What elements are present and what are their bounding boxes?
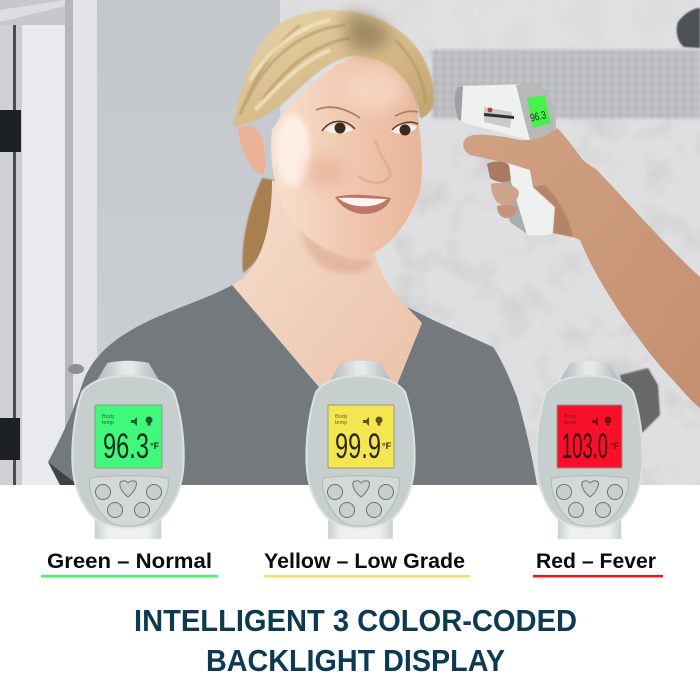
red display — [557, 405, 622, 468]
green screen: 96.3 — [529, 109, 547, 125]
display icons — [592, 416, 612, 426]
gun head grey rear — [516, 83, 556, 140]
device shell — [72, 361, 184, 539]
device label — [484, 107, 514, 128]
fahrenheit unit: °F — [382, 441, 392, 451]
green display — [95, 405, 162, 468]
hand shading — [533, 185, 573, 237]
display icons — [131, 416, 152, 426]
neck and chest — [232, 180, 422, 386]
gun head — [455, 84, 530, 140]
green screen — [527, 95, 551, 128]
grey t-shirt — [48, 285, 537, 485]
face — [271, 55, 422, 257]
thermometer: red — [536, 361, 643, 539]
display text: body temp: Body — [335, 414, 348, 420]
handle back strip — [502, 180, 526, 234]
yellow display — [328, 405, 394, 468]
thermometer: green: temp — [102, 420, 114, 426]
handheld thermometer and hand — [455, 83, 700, 408]
label: green normal: Green – Normal — [47, 550, 212, 573]
photo background: bathroom — [0, 0, 700, 485]
button panel — [90, 476, 168, 526]
woman — [48, 10, 537, 485]
title — [134, 603, 577, 678]
buttons — [556, 481, 622, 518]
label: red fever: Red – Fever — [536, 550, 656, 573]
display text: body temp: Body — [564, 414, 577, 420]
ponytail — [242, 178, 274, 273]
device shell — [306, 361, 415, 539]
hair strands — [240, 25, 426, 115]
sleeve shadow — [48, 462, 78, 485]
ear — [238, 126, 266, 175]
button panel — [552, 476, 628, 526]
handle — [507, 160, 555, 236]
thermometer: red: temp — [564, 420, 576, 426]
title: BACKLIGHT DISPLAY — [206, 643, 505, 678]
thermometer: yellow — [306, 361, 415, 539]
button panel — [323, 476, 399, 526]
thermometer: green — [72, 361, 184, 539]
under-chin shadow — [300, 228, 373, 273]
eyes — [316, 107, 418, 136]
buttons — [328, 481, 394, 518]
thermometer: yellow: temp — [335, 420, 347, 426]
temperature value: 96.3 — [103, 427, 149, 466]
label: yellow low grade: Yellow – Low Grade — [264, 550, 465, 573]
fahrenheit unit: °F — [610, 441, 620, 451]
fahrenheit unit: °F — [150, 441, 160, 451]
temperature value: 99.9 — [335, 427, 381, 466]
title: INTELLIGENT 3 COLOR-CODED — [134, 603, 577, 638]
device shell — [536, 361, 643, 539]
nose — [358, 140, 390, 183]
gun nose cap — [455, 86, 463, 121]
display icons — [363, 416, 382, 426]
smile — [335, 195, 391, 214]
arm and hand — [463, 128, 700, 408]
temperature value: 103.0 — [562, 427, 608, 466]
buttons — [96, 481, 162, 518]
hair — [233, 10, 434, 127]
fingers — [487, 161, 519, 218]
display text: body temp: Body — [102, 414, 115, 420]
